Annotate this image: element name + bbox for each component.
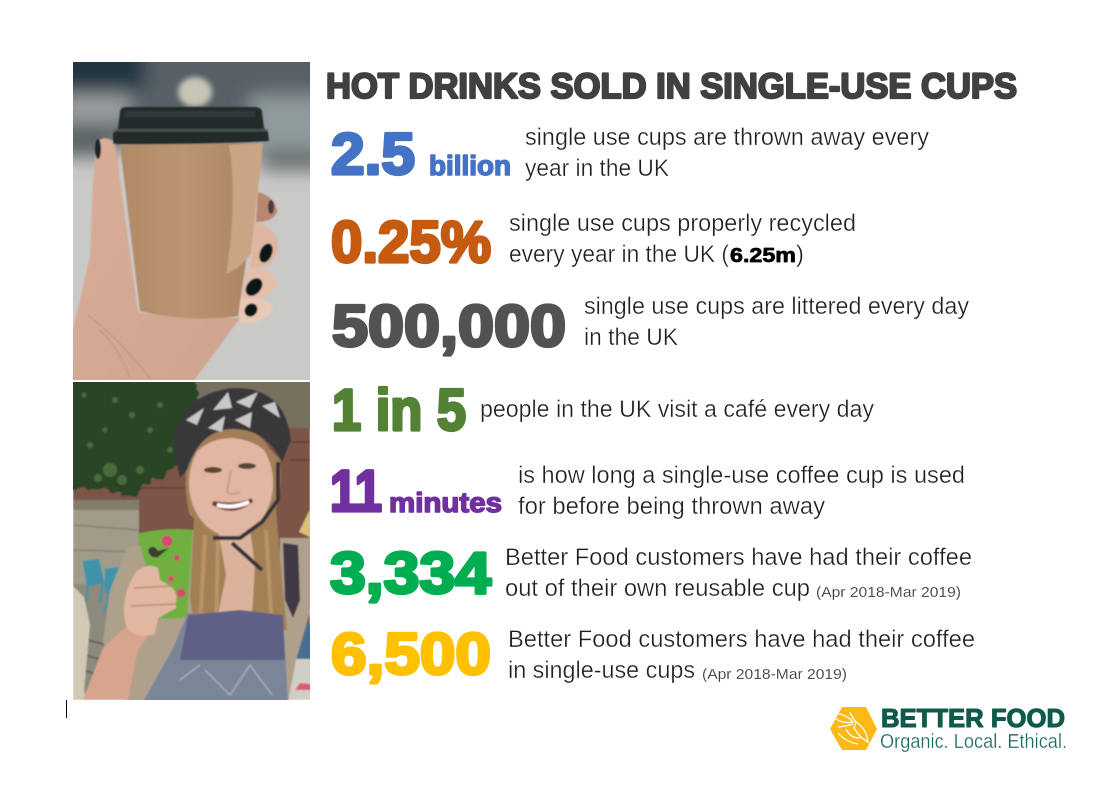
title: HOT DRINKS SOLD IN SINGLE-USE CUPS (326, 66, 1017, 106)
icon: yellow hexagon with bee (830, 707, 877, 750)
stat: 3,334 reusable cup customers (330, 541, 972, 606)
hand and palm (70, 138, 240, 382)
stat: 6,500 single-use cup customers: 6,500 (331, 622, 491, 687)
stat: 1 in 5 visit a cafe: people in the UK visit a café every day (480, 396, 874, 423)
stat: 6,500 single-use cup customers (331, 622, 975, 687)
stat: 3,334 reusable cup customers: (Apr 2018-Mar 2019) (816, 585, 961, 601)
stat: 11 minutes: 11 (330, 459, 382, 524)
cursor mark (66, 700, 67, 718)
chin strap (213, 462, 278, 570)
forearm (83, 626, 148, 700)
icon: painted nails (95, 139, 275, 319)
stat: 11 minutes: minutes (389, 487, 502, 518)
stat: 11 minutes (330, 459, 965, 524)
stat: 3,334 reusable cup customers: out of their own reusable cup (505, 575, 810, 602)
stat: 6,500 single-use cup customers: in single-use cups (508, 657, 695, 684)
stat: 500,000 littered: in the UK (584, 324, 678, 351)
stat: 0.25% recycled: every year in the UK ( (509, 241, 729, 268)
backpack strap (283, 543, 300, 618)
background blue and pink details (298, 508, 310, 538)
stat: 2.5 billion thrown away: single use cups are thrown away every (525, 124, 929, 151)
logo: Better Food: BETTER FOOD (881, 703, 1065, 733)
stat: 3,334 reusable cup customers: 3,334 (330, 541, 491, 606)
stat: 500,000 littered: 500,000 (332, 294, 566, 359)
stat: 6,500 single-use cup customers: (Apr 2018-Mar 2019) (702, 667, 847, 683)
photo: hand holding a paper coffee cup (73, 62, 310, 380)
stat: 3,334 reusable cup customers: Better Food customers have had their coffee (505, 544, 972, 571)
hair (186, 433, 287, 633)
stat: 2.5 billion thrown away: billion (429, 150, 511, 181)
logo: Better Food: Organic. Local. Ethical. (880, 731, 1067, 753)
stat: 2.5 billion thrown away (331, 122, 929, 187)
jacket right (280, 538, 312, 702)
stat: 0.25% recycled: single use cups properly recycled (509, 210, 856, 237)
jacket left (103, 530, 200, 702)
blouse (143, 613, 288, 702)
stat: 1 in 5 visit a cafe (332, 378, 874, 443)
icon: blue chairs (84, 560, 120, 612)
stat: 0.25% recycled: 0.25% (331, 210, 491, 275)
photo: smiling woman in a helmet holding a reusable cup (68, 376, 315, 702)
stat: 0.25% recycled: 6.25m (730, 245, 796, 267)
stat: 6,500 single-use cup customers: Better Food customers have had their coffee (508, 626, 975, 653)
stat: 500,000 littered: single use cups are littered every day (584, 293, 969, 320)
stat: 11 minutes: for before being thrown away (518, 493, 825, 520)
helmet (173, 388, 291, 478)
planter (73, 500, 139, 584)
stat: 2.5 billion thrown away: year in the UK (525, 155, 669, 182)
stat: 11 minutes: is how long a single-use coffee cup is used (518, 462, 965, 489)
hand gripping cup (124, 566, 176, 636)
tree (68, 376, 198, 496)
stat: 0.25% recycled (331, 210, 856, 275)
icon: green cup with pink flowers (137, 529, 193, 619)
face (189, 430, 273, 536)
stat: 0.25% recycled: ) (796, 241, 804, 268)
icon: black lid (113, 107, 269, 144)
neck and chest (218, 532, 256, 613)
icon: kraft paper cup body (120, 143, 263, 319)
stat: 500,000 littered (332, 293, 969, 359)
stat: 2.5 billion thrown away: 2.5 (331, 122, 415, 187)
logo: Better Food (830, 703, 1067, 753)
stat: 1 in 5 visit a cafe: 1 in 5 (332, 378, 466, 443)
